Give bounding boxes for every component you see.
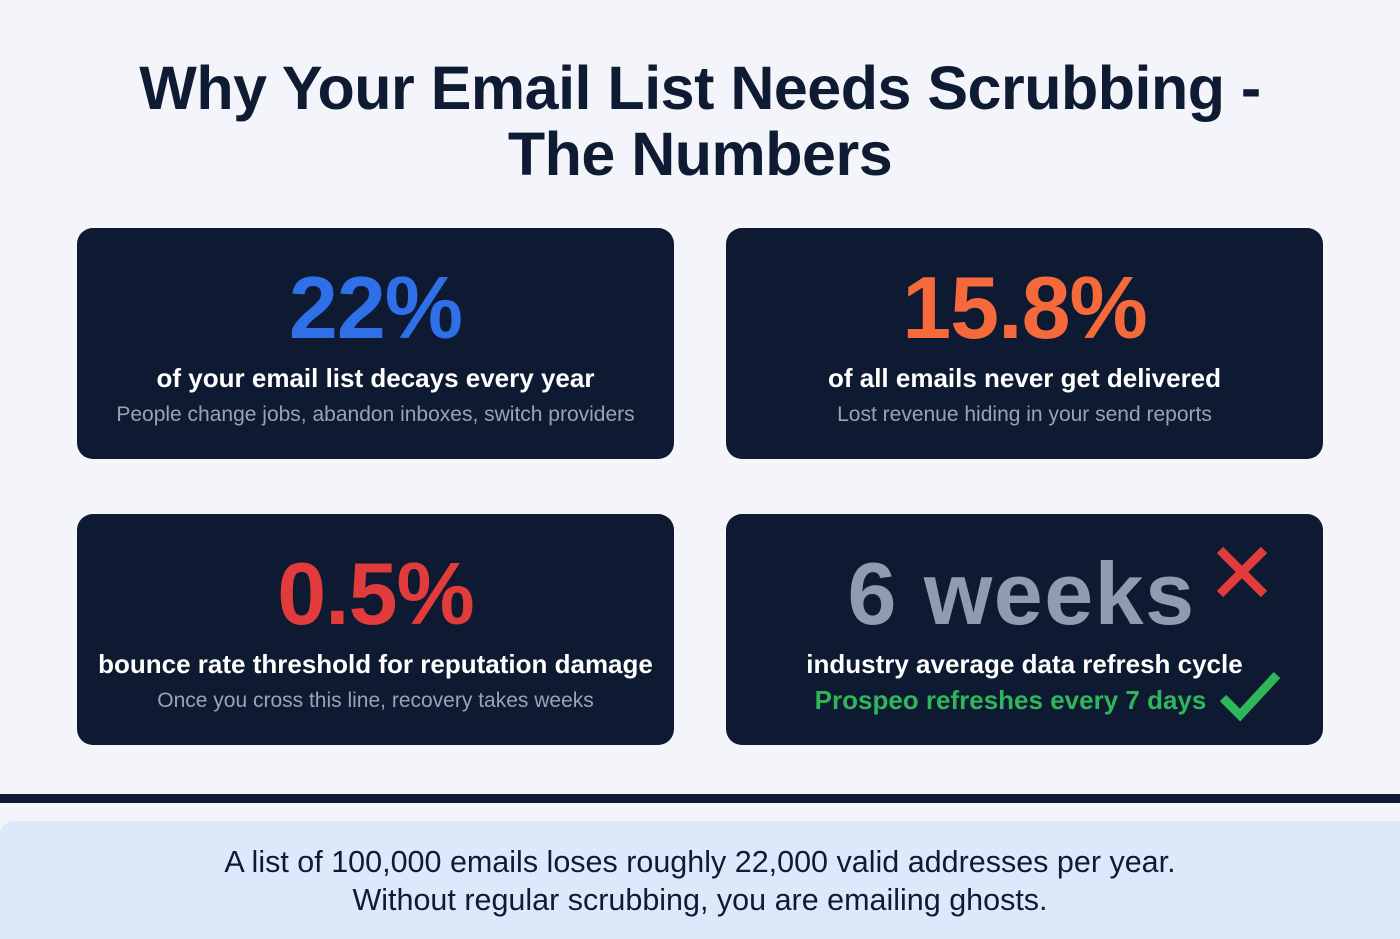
stat number: 6 weeks bbox=[847, 544, 1196, 643]
icon: red cross bbox=[1216, 546, 1268, 598]
stat number: 0.5% bbox=[277, 544, 474, 643]
panel: 6 weeks refresh bbox=[726, 514, 1323, 745]
panel: 0.5% bounce bbox=[77, 514, 674, 745]
stat number: 22% bbox=[289, 258, 462, 357]
footer callout: Without regular scrubbing, you are emailing ghosts. bbox=[352, 883, 1048, 917]
panel: 22% decay bbox=[77, 228, 674, 459]
stat detail: Lost revenue hiding in your send reports bbox=[837, 403, 1212, 426]
title: The Numbers bbox=[508, 120, 892, 188]
stat label: bounce rate threshold for reputation damage bbox=[98, 649, 653, 679]
stat detail: Once you cross this line, recovery takes weeks bbox=[157, 689, 594, 712]
stat label: of all emails never get delivered bbox=[828, 363, 1221, 393]
title bbox=[139, 54, 1261, 188]
prospeo note: Prospeo refreshes every 7 days bbox=[815, 685, 1206, 715]
title: Why Your Email List Needs Scrubbing - bbox=[139, 54, 1261, 122]
stat detail: People change jobs, abandon inboxes, switch providers bbox=[116, 403, 635, 426]
stat label: industry average data refresh cycle bbox=[806, 649, 1243, 679]
stat label: of your email list decays every year bbox=[157, 363, 594, 393]
footer callout: A list of 100,000 emails loses roughly 22,000 valid addresses per year. bbox=[224, 845, 1176, 879]
stat number: 15.8% bbox=[902, 258, 1147, 357]
footer callout bbox=[0, 821, 1400, 939]
icon: green check bbox=[1220, 672, 1280, 722]
panel: 15.8% undelivered bbox=[726, 228, 1323, 459]
